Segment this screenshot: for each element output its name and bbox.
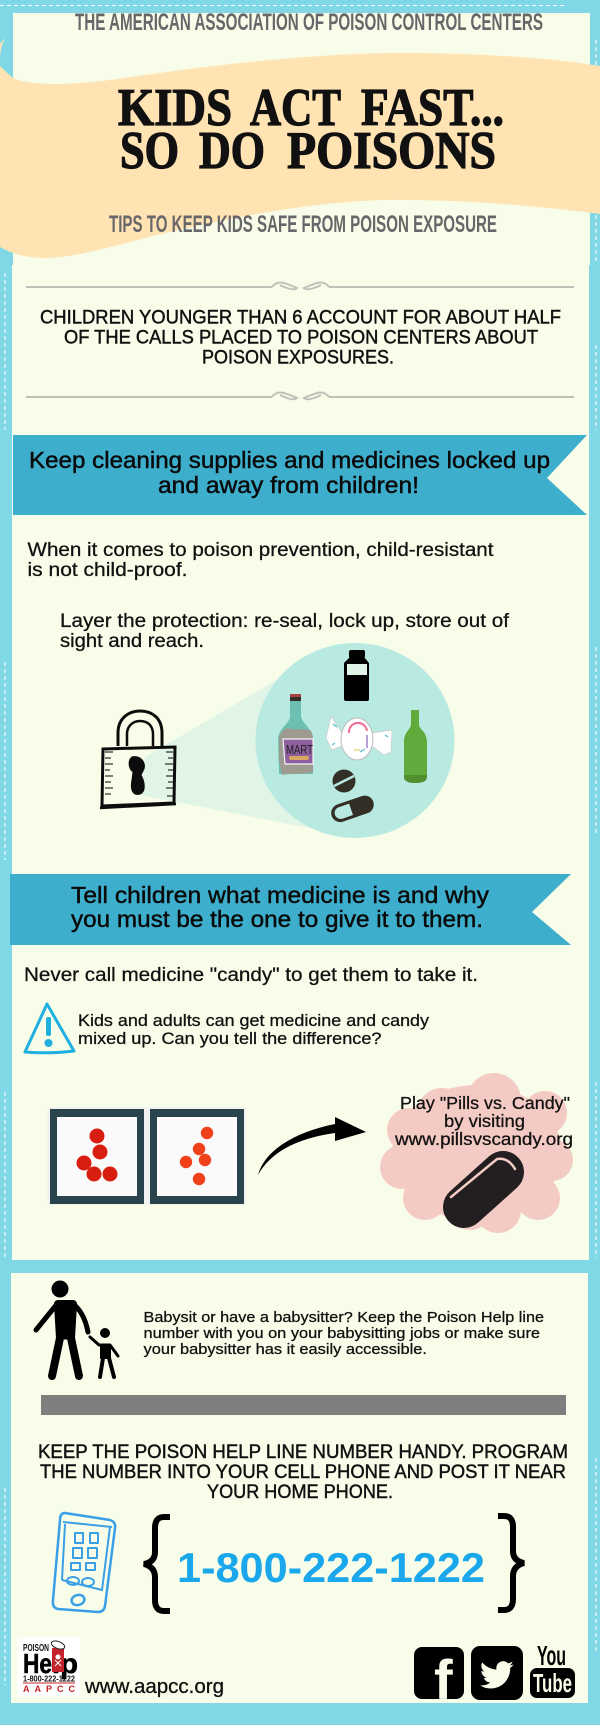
icon: capsule [329, 793, 376, 825]
text: child-resistant [28, 540, 494, 581]
text: babysitter tip [144, 1309, 544, 1358]
icon: black bottle [344, 650, 369, 701]
banner: tell children what medicine is: you must be the one to give it to them. [71, 906, 483, 932]
cloud: play pills vs candy: www.pillsvscandy.org [394, 1129, 573, 1149]
icon: teal liquor bottle: MART [286, 742, 313, 757]
text: child-resistant: When it comes to poison prevention, child-resistant [28, 540, 494, 561]
statistic text: POISON EXPOSURES. [202, 348, 394, 368]
panel: main content background [12, 265, 589, 1260]
icon: wrapped candy [326, 716, 392, 760]
text: layer the protection: sight and reach. [60, 631, 204, 652]
illustration: magnifier cone [140, 678, 320, 830]
text: layer the protection: Layer the protection: re-seal, lock up, store out of [60, 611, 510, 632]
icon: Twitter [471, 1646, 523, 1700]
text: keep the number handy: KEEP THE POISON HELP LINE NUMBER HANDY. PROGRAM [38, 1442, 568, 1463]
text: medicine and candy mixed up: Kids and adults can get medicine and candy [78, 1011, 430, 1030]
text: medicine and candy mixed up [78, 1011, 430, 1048]
icon: round tablet [332, 770, 356, 792]
cloud: play pills vs candy: Play "Pills vs. Candy" [400, 1093, 570, 1113]
text: keep the number handy [38, 1442, 568, 1503]
banner: tell children what medicine is: Tell children what medicine is and why [71, 882, 490, 908]
website: www.aapcc.org [84, 1676, 224, 1698]
panel: bottom help-line background [11, 1273, 588, 1703]
statistic text: OF THE CALLS PLACED TO POISON CENTERS ABOUT [64, 328, 538, 348]
icon: warning triangle [25, 1004, 74, 1053]
cloud: play pills vs candy [380, 1073, 573, 1233]
icon: green bottle [404, 710, 427, 783]
icon: teal liquor bottle [278, 694, 313, 775]
logo: Poison Help AAPCC: 1-800-222-1222 [23, 1674, 75, 1684]
banner: tell children what medicine is [10, 874, 571, 945]
photo frame: candy [150, 1109, 244, 1204]
title [118, 79, 504, 180]
text: medicine and candy mixed up: mixed up. Can you tell the difference? [78, 1029, 382, 1048]
text: child-resistant: is not child-proof. [28, 560, 188, 581]
icon: Facebook: f [434, 1648, 453, 1711]
gray divider bar [41, 1395, 566, 1415]
text: keep the number handy: THE NUMBER INTO YOUR CELL PHONE AND POST IT NEAR [40, 1462, 566, 1483]
title: SO [120, 122, 179, 180]
statistic text: CHILDREN YOUNGER THAN 6 ACCOUNT FOR ABOUT HALF [40, 308, 561, 328]
icon: Facebook [414, 1647, 464, 1711]
title: ACT [250, 79, 341, 137]
logo: Poison Help AAPCC: lp [52, 1648, 78, 1679]
ornament divider top [26, 282, 574, 289]
icon: YouTube: You [537, 1640, 566, 1671]
icon: padlock [100, 711, 176, 808]
title: POISONS [287, 122, 496, 180]
statistic text [40, 308, 561, 368]
arrow: to the game [258, 1117, 366, 1175]
text: never call medicine candy: Never call medicine "candy" to get them to take it. [24, 964, 478, 986]
text: keep the number handy: YOUR HOME PHONE. [207, 1482, 393, 1503]
banner: keep supplies locked up: Keep cleaning supplies and medicines locked up [29, 447, 550, 473]
text: layer the protection [60, 611, 510, 652]
text: babysitter tip: number with you on your babysitting jobs or make sure [144, 1325, 540, 1342]
text: babysitter tip: your babysitter has it easily accessible. [144, 1341, 427, 1358]
help line number with braces: 1-800-222-1222 [177, 1544, 485, 1591]
ribbon: header banner [0, 38, 600, 258]
icon: sketched smartphone [53, 1513, 115, 1612]
logo: Poison Help AAPCC: AAPCC [23, 1684, 76, 1694]
logo: Poison Help AAPCC: POISON [23, 1643, 49, 1654]
icon: black capsule [451, 1159, 515, 1207]
photo frame: pills [50, 1109, 144, 1204]
title: DO [199, 122, 265, 180]
banner: keep supplies locked up [13, 435, 587, 515]
cloud: play pills vs candy: by visiting [444, 1111, 525, 1131]
photo pair: pills versus candy [48, 1107, 246, 1205]
logo: Poison Help AAPCC [17, 1637, 80, 1696]
ornament divider bottom [26, 392, 574, 399]
help line number with braces [144, 1516, 524, 1611]
icon: YouTube: Tube [533, 1668, 572, 1698]
title: FAST... [361, 79, 504, 137]
panel: top header background [13, 13, 590, 265]
banner: keep supplies locked up: and away from children! [158, 472, 419, 498]
logo: Poison Help AAPCC: He [23, 1648, 52, 1679]
title: KIDS [118, 79, 232, 137]
illustration: circle of hazards [140, 643, 454, 838]
icon: YouTube [530, 1640, 575, 1698]
text: babysitter tip: Babysit or have a babysitter? Keep the Poison Help line [144, 1309, 544, 1326]
icon: adult and child [36, 1280, 118, 1377]
